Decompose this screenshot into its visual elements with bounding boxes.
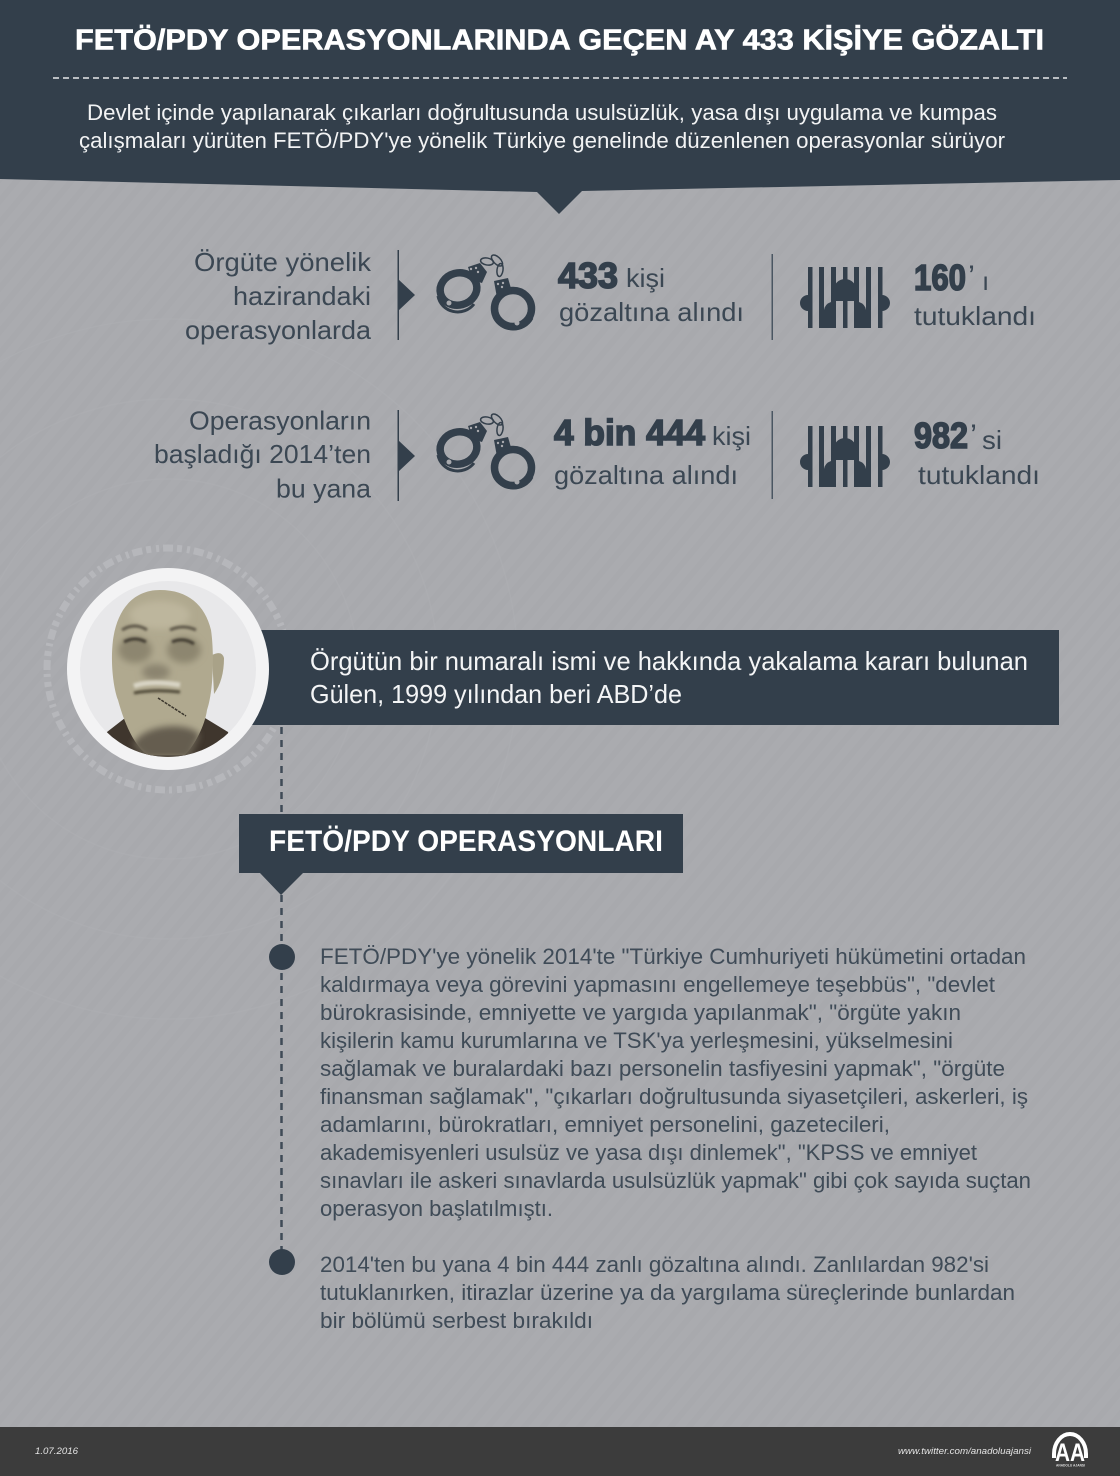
stat: 982 arrested (914, 415, 1040, 490)
stat: 433 detained: kişi (626, 263, 665, 293)
icon: prison bars (800, 267, 890, 328)
arrow (398, 410, 415, 501)
callout bar: Gülen, 1999 yılından beri ABD’de (310, 679, 682, 709)
date: 1.07.2016 (35, 1446, 79, 1457)
row label: hazirandaki (233, 281, 371, 311)
body paragraph 1: kişilerin kamu kurumlarına ve TSK'ya yerleşmesini, yükselmesini (320, 1028, 953, 1053)
body paragraph 1: operasyon başlatılmıştı. (320, 1196, 553, 1221)
stat: 160 arrested (914, 257, 1036, 331)
body paragraph 1: adamlarını, bürokratları, emniyet personelini, gazetecileri, (320, 1112, 890, 1137)
subtitle (79, 100, 1005, 153)
body paragraph 1: bürokrasisinde, emniyette ve yargıda yapılanmak", "örgüte yakın (320, 1000, 961, 1025)
stat: 4 bin 444 detained: gözaltına alındı (554, 460, 738, 490)
row label: operasyonlarda (185, 315, 372, 345)
stat: 160 arrested: 160 (914, 257, 966, 298)
body paragraph 2: 2014'ten bu yana 4 bin 444 zanlı gözaltına alındı. Zanlılardan 982'si (320, 1252, 989, 1277)
row label (185, 247, 372, 345)
title: FETÖ/PDY OPERASYONLARINDA GEÇEN AY 433 KİŞİYE GÖZALTI (75, 24, 1044, 56)
stat: 4 bin 444 detained: 4 bin 444 (554, 412, 705, 453)
stat: 982 arrested: ’ (970, 419, 977, 452)
bullet (269, 1249, 295, 1275)
stat: 982 arrested: 982 (914, 415, 968, 456)
stat row: since 2014 (154, 406, 1040, 504)
stat row: June operations (185, 247, 1036, 345)
row label (154, 406, 372, 504)
row label: Örgüte yönelik (194, 247, 372, 277)
subtitle: çalışmaları yürüten FETÖ/PDY'ye yönelik Türkiye genelinde düzenlenen operasyonlar sürüyor (79, 128, 1005, 153)
row label: bu yana (276, 474, 372, 504)
subtitle: Devlet içinde yapılanarak çıkarları doğrultusunda usulsüzlük, yasa dışı uygulama ve kumpas (87, 100, 997, 125)
body paragraph 1: FETÖ/PDY'ye yönelik 2014'te "Türkiye Cumhuriyeti hükümetini ortadan (320, 944, 1026, 969)
body paragraph 2 (320, 1252, 1015, 1333)
stat: 433 detained: 433 (558, 255, 618, 296)
header banner (0, 0, 1120, 214)
stat: 4 bin 444 detained (554, 412, 751, 490)
logo: AA: AA (1055, 1439, 1085, 1467)
body paragraph 1: finansman sağlamak", "çıkarları doğrultusunda siyasetçileri, askerleri, iş (320, 1084, 1028, 1109)
decorative ring (47, 548, 289, 790)
arrow (398, 250, 415, 340)
stat: 433 detained: gözaltına alındı (559, 297, 744, 327)
icon: handcuffs (436, 253, 532, 329)
logo: AA: ANADOLU AJANSI (1056, 1464, 1085, 1468)
dashed timeline (280, 727, 283, 1262)
stat: 982 arrested: tutuklandı (918, 460, 1040, 490)
body paragraph 1: kaldırmaya veya görevini yapmasını engellemeye teşebbüs", "devlet (320, 972, 995, 997)
row label: başladığı 2014’ten (154, 439, 371, 469)
body paragraph 1: sağlamak ve buralardaki bazı personelin tasfiyesini yapmak", "örgüte (320, 1056, 1005, 1081)
callout bar (240, 630, 1059, 725)
body paragraph 1: akademisyenleri usulsüz ve yasa dışı dinlemek", "KPSS ve emniyet (320, 1140, 977, 1165)
stat: 982 arrested: si (982, 425, 1002, 455)
body paragraph 2: bir bölümü serbest bırakıldı (320, 1308, 593, 1333)
row label: Operasyonların (189, 406, 371, 436)
icon: handcuffs (436, 412, 532, 488)
body paragraph 1: sınavları ile askeri sınavlarda usulsüzlük yapmak" gibi çok sayıda suçtan (320, 1168, 1031, 1193)
body paragraph 1 (320, 944, 1031, 1221)
section heading: FETÖ/PDY OPERASYONLARI (269, 825, 663, 858)
source url: www.twitter.com/anadoluajansi (898, 1446, 1032, 1457)
bullet (269, 944, 295, 970)
body paragraph 2: tutuklanırken, itirazlar üzerine ya da yargılama süreçlerinde bunlardan (320, 1280, 1015, 1305)
stat: 433 detained (558, 255, 744, 327)
stat: 4 bin 444 detained: kişi (712, 421, 751, 451)
stat: 160 arrested: ’ (968, 260, 975, 293)
callout bar: Örgütün bir numaralı ismi ve hakkında yakalama kararı bulunan (310, 646, 1028, 676)
icon: prison bars (800, 426, 890, 487)
stat: 160 arrested: tutuklandı (914, 301, 1036, 331)
footer (0, 1427, 1120, 1476)
stat: 160 arrested: ı (982, 266, 989, 296)
portrait (67, 568, 269, 770)
section heading (239, 814, 683, 895)
